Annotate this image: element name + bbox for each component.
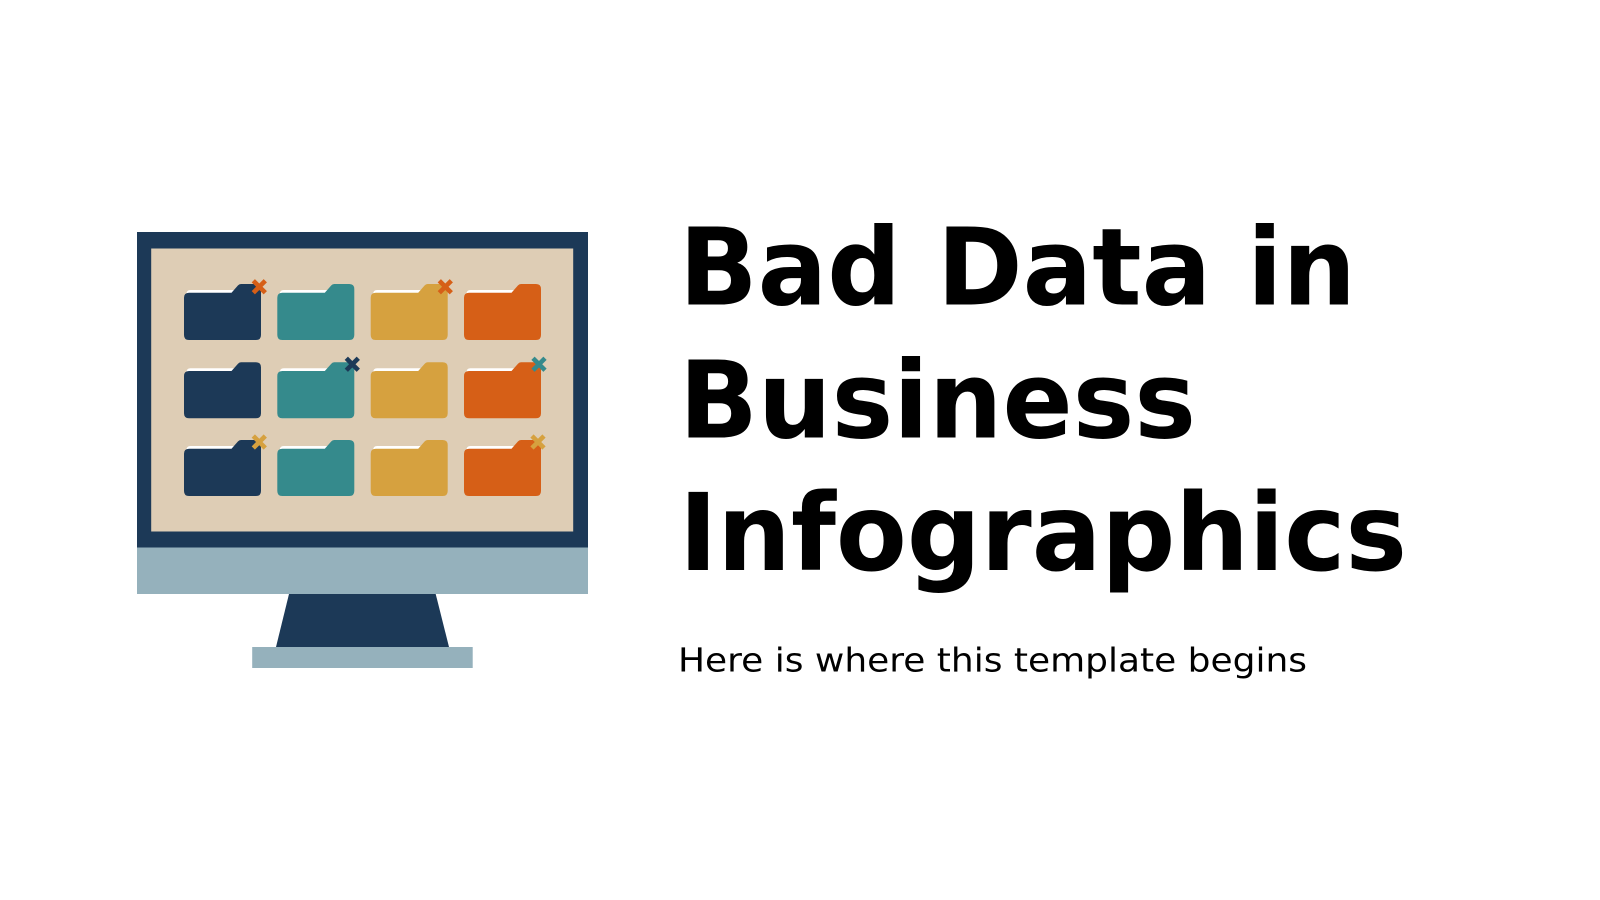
subtitle: Here is where this template begins [678,641,1307,680]
folder: row 2 gold [371,362,448,418]
monitor stand base [252,647,473,668]
icon: computer monitor [137,232,588,668]
folder: row 1 orange [464,284,541,340]
monitor frame [137,232,588,548]
monitor screen [151,248,573,532]
title: Business [679,339,1196,463]
folder: row 3 gold [371,440,448,496]
monitor chin [137,547,588,594]
folder: row 3 navy with gold cross [184,436,265,496]
folder: row 2 orange with teal cross [464,358,545,418]
title: Infographics [679,472,1407,596]
monitor stand neck [276,594,449,647]
title: Bad Data in [679,206,1356,330]
folder: row 3 orange with gold cross [464,436,544,496]
folder: row 2 teal with navy cross [277,358,358,418]
folder: row 1 navy with orange cross [184,281,265,340]
folder: row 1 gold with orange cross [371,281,451,340]
folder: row 1 teal [277,284,354,340]
title [679,206,1407,596]
folder: row 2 navy [184,362,261,418]
folder: row 3 teal [277,440,354,496]
